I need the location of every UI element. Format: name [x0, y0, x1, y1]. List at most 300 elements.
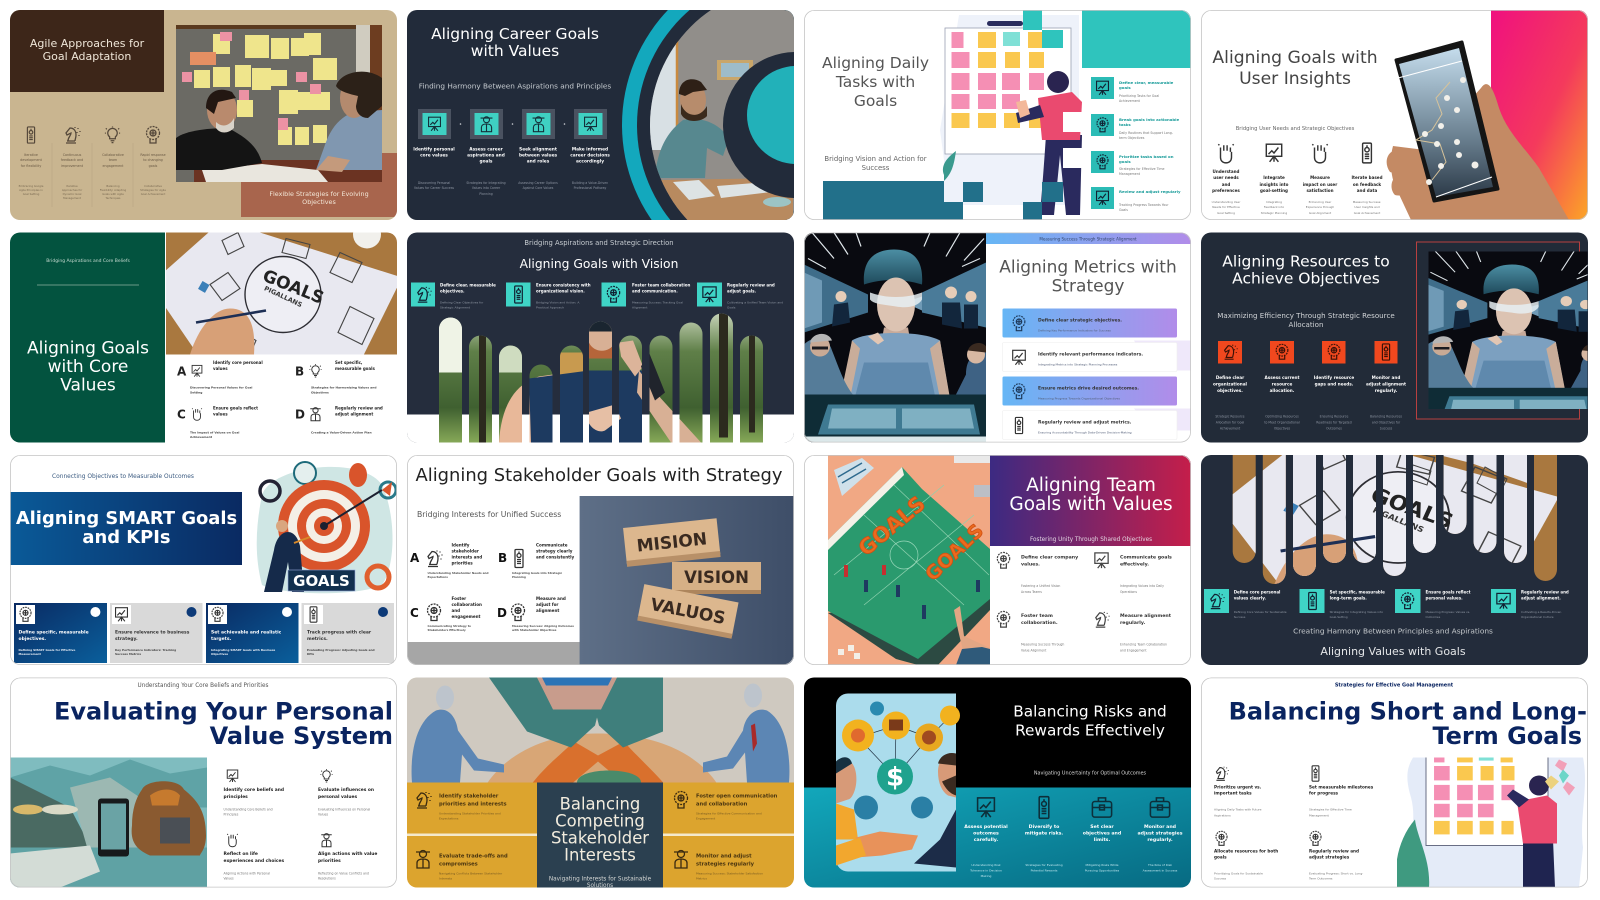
stakeholder grid A-D: Identify: [452, 542, 470, 548]
title block: Goal Adaptation: [43, 50, 131, 63]
gradient panel: [1491, 10, 1588, 220]
four alignment items: Organizational Culture: [1521, 615, 1554, 619]
stakeholder grid A-D: Stakeholders Effectively: [428, 628, 466, 632]
title: Goals: [854, 92, 897, 110]
four gold panels: Metrics: [696, 876, 707, 880]
title: Term Goals: [1432, 722, 1582, 750]
four KPI cards: targets.: [211, 636, 232, 642]
four objectives: Ensure consistency with: [536, 282, 591, 288]
title: Aligning Goals with: [1212, 48, 1378, 68]
item grid A-D: A: [177, 364, 187, 378]
four KPI cards: [14, 603, 394, 663]
photo: backpack and phone on table: [10, 758, 207, 888]
item grid A-D: Set specific,: [335, 360, 363, 365]
panel: Aligning Goals with User Insights: [1201, 10, 1588, 220]
step descriptions: Professional Pathway: [574, 186, 606, 190]
item grid A-D: The Impact of Values on Goal: [190, 430, 239, 434]
four value items: values.: [1021, 562, 1040, 568]
four value items: regularly.: [1120, 620, 1145, 626]
title banner: Aligning SMART Goals: [16, 508, 237, 529]
four approach columns with icons: Dynamic Goal: [63, 192, 82, 196]
step labels: [413, 146, 610, 164]
labels: objectives and: [1083, 830, 1121, 836]
panel: Balancing Short and Long-Term Goals: [1201, 678, 1588, 888]
four balance items: Aligning Daily Tasks with Future: [1214, 808, 1262, 812]
photo: wooden blocks Mision Vision Valuos: MISION: [636, 529, 708, 557]
four gold panels: Interests: [439, 876, 453, 880]
four approach columns with icons: Continuous: [63, 153, 82, 157]
step labels: between values: [519, 152, 557, 158]
four balance items: Success: [1214, 876, 1227, 880]
four balance items: for progress: [1309, 790, 1339, 796]
step labels: regularly.: [1375, 388, 1398, 393]
title: Evaluating Your Personal: [54, 698, 393, 726]
four objectives: Strategic Alignment: [440, 306, 471, 310]
step labels: and data: [1357, 188, 1377, 193]
metric rows: Integrating Metrics into Strategic Planning Processes: [1038, 362, 1118, 366]
four objectives: Bridging Vision and Action: A: [536, 300, 580, 304]
step descriptions: Outcomes: [1326, 426, 1342, 430]
step labels: Seek alignment: [519, 146, 557, 152]
photo: wooden blocks Mision Vision Valuos: [580, 496, 795, 665]
four value items: Fostering a Unified Vision: [1021, 584, 1060, 588]
four reflection items: Resolutions: [318, 876, 336, 880]
kicker: Bridging Aspirations and Strategic Direction: [524, 239, 674, 247]
step descriptions: [1212, 201, 1381, 214]
four reflection items: Identify core beliefs and: [224, 787, 284, 793]
step descriptions: Building a Value-Driven: [572, 181, 608, 185]
subtitle: Allocation: [1289, 320, 1323, 329]
four value items: Foster team: [1021, 613, 1053, 619]
descriptions: Making: [981, 874, 991, 878]
four balance items: Management: [1309, 814, 1330, 818]
step descriptions: Achievement: [1220, 426, 1241, 430]
subtitle block: [241, 153, 397, 217]
step descriptions: Ensuring Resource: [1320, 414, 1348, 418]
four value items: Integrating Values into Daily: [1120, 584, 1164, 588]
subtitle: Creating Harmony Between Principles and Aspirations: [1293, 626, 1493, 636]
kicker: Connecting Objectives to Measurable Outcomes: [52, 474, 194, 480]
step labels: and: [1222, 182, 1230, 187]
stakeholder grid A-D: adjust for: [536, 602, 558, 607]
panel: Aligning Team Goals with Values: [804, 455, 1191, 665]
photo: wooden blocks Mision Vision Valuos: VALUOS: [649, 595, 727, 629]
four balance items: [1214, 766, 1374, 880]
photo: two figures fitting puzzle blocks: [407, 678, 794, 784]
step labels: career decisions: [570, 152, 610, 158]
stakeholder grid A-D: Understanding Stakeholder Needs and: [428, 571, 489, 575]
subtitle: Bridging Vision and Action for: [824, 155, 927, 163]
four alignment items: Ensure goals reflect: [1426, 590, 1471, 594]
four reflection items: experiences and choices: [224, 858, 285, 864]
four alignment items: Defining Core Values for Sustainable: [1234, 610, 1287, 614]
stakeholder grid A-D: and consistently: [536, 554, 574, 560]
illustration: sticky-note board and man: [940, 15, 1082, 215]
center title block: [537, 782, 663, 889]
step descriptions: Experience through: [1306, 205, 1334, 209]
top kicker band: Measuring Success Through Strategic Alignment: [1039, 236, 1137, 242]
four approach columns with icons: development: [20, 158, 43, 162]
labels: Assess potential: [964, 824, 1008, 830]
panel: Aligning Goals with Vision: [407, 232, 794, 442]
four reflection items: Values: [224, 876, 234, 880]
subtitle: Bridging User Needs and Strategic Objectives: [1236, 126, 1355, 132]
step labels: impact on user: [1303, 182, 1337, 187]
action list: [1091, 77, 1181, 212]
four objectives: Foster team collaboration: [632, 282, 690, 288]
action list: Review and adjust regularly: [1119, 189, 1181, 194]
step labels: objectives.: [1217, 388, 1243, 393]
title: Strategy: [1052, 276, 1124, 296]
item grid A-D: values: [213, 412, 228, 416]
four gold panels: [407, 782, 794, 888]
four KPI cards: KPIs: [307, 652, 314, 656]
four approach columns with icons: Goals with Agile: [102, 192, 124, 196]
step descriptions: User Insights and: [1354, 205, 1380, 209]
four reflection items: Evaluate influences on: [318, 787, 374, 793]
subtitle: Success: [862, 164, 890, 172]
descriptions: Pursuing Opportunities: [1085, 868, 1120, 872]
four alignment items: [1204, 589, 1569, 619]
descriptions: Strategies for Evaluating: [1025, 863, 1063, 867]
panel: Balancing Risks and Rewards Effectively: [804, 678, 1191, 888]
photo: woman with visor at futuristic table: [804, 232, 986, 442]
step descriptions: Discovering Personal: [418, 181, 450, 185]
item grid A-D: adjust alignment: [335, 412, 373, 416]
stakeholder grid A-D: Communicating Strategy to: [428, 624, 471, 628]
item grid A-D: Achievement: [190, 435, 213, 439]
four alignment items: Set specific, measurable: [1330, 590, 1385, 594]
title block: Agile Approaches for: [30, 37, 145, 50]
step descriptions: Assessing Career Options: [518, 181, 558, 185]
step descriptions: and Objectives for: [1372, 420, 1401, 424]
labels: Diversify to: [1029, 824, 1060, 830]
four approach columns with icons: feedback and: [61, 158, 83, 162]
title banner: [10, 492, 242, 565]
four reflection items: [224, 769, 377, 880]
four balance items: Evaluating Progress: Short vs. Long-: [1309, 872, 1363, 876]
step descriptions: Strategies for Integrating: [466, 181, 506, 185]
four gold panels: Expectations: [439, 816, 459, 820]
step descriptions: Success: [1380, 426, 1393, 430]
four KPI cards: Key Performance Indicators: Tracking: [115, 648, 176, 652]
four icons: [1218, 143, 1371, 163]
step labels: Assess current: [1265, 375, 1299, 380]
kicker: Understanding Your Core Beliefs and Priorities: [138, 683, 268, 689]
four reflection items: Evaluating Influences on Personal: [318, 808, 370, 812]
four gold panels: Understanding Stakeholder Priorities and: [439, 812, 501, 816]
pale background shapes: [1134, 340, 1191, 430]
panel: Aligning SMART Goals and KPIs: [10, 455, 397, 665]
step descriptions: Against Core Values: [523, 186, 554, 190]
title: Aligning Resources to: [1222, 252, 1390, 270]
four KPI cards: Objectives: [211, 652, 228, 656]
four objectives: objectives.: [440, 288, 465, 294]
four reflection items: personal values: [318, 794, 357, 800]
step labels: Identify personal: [413, 146, 455, 152]
action list: Management: [1119, 172, 1141, 176]
four approach columns with icons: improvement: [61, 164, 84, 168]
panel: Aligning Resources to Achieve Objectives: [1201, 232, 1600, 442]
four value items: effectively.: [1120, 562, 1149, 568]
step descriptions: Goal Alignment: [1309, 211, 1332, 215]
descriptions: The Role of Risk: [1147, 863, 1172, 867]
title: [431, 28, 598, 56]
four reflection items: principles: [224, 794, 248, 800]
four value items: Operations: [1120, 590, 1137, 594]
item grid A-D: D: [295, 408, 305, 422]
step labels: [1212, 169, 1383, 193]
photo in hanging slits: goals diagram: [1164, 419, 1570, 611]
step labels: gaps and needs.: [1315, 382, 1354, 386]
four gold panels: strategies regularly: [696, 862, 755, 868]
step descriptions: Measuring Success:: [1353, 200, 1381, 204]
action list: Achievement: [1119, 99, 1141, 103]
labels: Monitor and: [1144, 824, 1176, 830]
step descriptions: Understanding User: [1212, 200, 1241, 204]
item grid A-D: Strategies for Harmonizing Values and: [311, 386, 376, 390]
four alignment items: Strategies for Integrating Values into: [1330, 610, 1383, 614]
four approach columns with icons: Goal Setting: [23, 192, 40, 196]
four reflection items: Values: [318, 812, 328, 816]
photo: wooden blocks Mision Vision Valuos: VISION: [684, 568, 749, 587]
stakeholder grid A-D: C: [410, 606, 419, 620]
four approach columns with icons: Approaches for: [62, 188, 83, 192]
stakeholder grid A-D: priorities: [452, 560, 473, 566]
gradient title block: Goals with Values: [1009, 494, 1173, 515]
title: Aligning Career Goals: [431, 25, 599, 43]
four approach columns with icons: Agile Principles in: [19, 188, 43, 192]
stakeholder grid A-D: strategy clearly: [536, 548, 573, 554]
step descriptions: Integrating: [1266, 200, 1282, 204]
green side block with title: Aligning Goals: [27, 338, 149, 358]
subtitle: Finding Harmony Between Aspirations and Principles: [419, 82, 611, 90]
title: [999, 258, 1177, 296]
four balance items: goals: [1214, 854, 1227, 860]
four value items: Measuring Success Through: [1021, 642, 1064, 646]
stakeholder grid A-D: B: [498, 551, 507, 565]
illustration: target with arrow and GOALS sign: GOALS: [293, 572, 350, 590]
four approach columns with icons: to changing: [143, 158, 163, 162]
step labels: Integrate: [1263, 175, 1285, 180]
photo: goals diagram and hand: [166, 232, 397, 354]
four alignment items: Cultivating a Results-Driven: [1521, 610, 1561, 614]
four balance items: Regularly review and: [1309, 848, 1359, 854]
labels: adjust strategies: [1138, 830, 1183, 836]
photo: football pitch with GOALS lettering: [828, 455, 990, 665]
four gold panels: Strategies for Effective Communication and: [696, 812, 762, 816]
four approach columns with icons: Techniques: [105, 196, 121, 200]
photo: hand holding phone: [1387, 42, 1569, 220]
step labels: and roles: [527, 158, 550, 164]
four balance items: adjust strategies: [1309, 854, 1350, 860]
title: [822, 56, 928, 106]
four approach columns with icons: [19, 126, 166, 207]
step labels: user needs: [1213, 175, 1239, 180]
action list: term Objectives: [1119, 136, 1145, 140]
action list: goals: [1119, 159, 1131, 164]
title: Aligning Values with Goals: [1320, 645, 1466, 658]
stakeholder grid A-D: A: [410, 551, 420, 565]
four step icons: [418, 109, 607, 139]
step descriptions: Objectives: [1274, 426, 1291, 430]
title: [1013, 702, 1167, 740]
four balance items: important tasks: [1214, 790, 1252, 796]
four objectives: Measuring Success: Tracking Goal: [632, 300, 683, 304]
subtitle: Maximizing Efficiency Through Strategic Resource: [1217, 311, 1395, 320]
step descriptions: Goal Achievement: [1354, 211, 1381, 215]
four gold panels: compromises: [439, 862, 478, 868]
item grid A-D: Objectives: [311, 390, 329, 394]
descriptions: Mitigating Risks While: [1085, 863, 1119, 867]
four approach columns with icons: for flexibility: [21, 164, 41, 168]
center title block: Solutions: [587, 883, 613, 889]
stakeholder grid A-D: with Stakeholder Objectives: [512, 628, 557, 632]
four reflection items: Aligning Actions with Personal: [224, 872, 270, 876]
gradient title block: Aligning Team: [1026, 475, 1156, 496]
four gold panels: Foster open communication: [696, 794, 778, 800]
four balance items: Aspirations: [1214, 814, 1231, 818]
subtitle block: Objectives: [302, 198, 336, 206]
stakeholder grid A-D: Foster: [452, 596, 466, 601]
step descriptions: [1215, 414, 1402, 430]
step labels: [1213, 375, 1406, 393]
four KPI cards: metrics.: [307, 636, 328, 642]
stakeholder grid A-D: stakeholder: [452, 548, 479, 554]
metric rows: Measuring Progress Towards Organizational Objectives: [1038, 396, 1120, 400]
title: Aligning Metrics with: [999, 258, 1177, 278]
four balance items: Prioritize urgent vs.: [1214, 784, 1262, 790]
item grid A-D: Creating a Value-Driven Action Plan: [311, 430, 372, 434]
action list: Prioritizing Tasks for Goal: [1119, 94, 1159, 98]
item grid A-D: Setting: [190, 390, 202, 394]
title: [54, 698, 393, 750]
four approach columns with icons: Embracing Google: [19, 184, 44, 188]
item grid A-D: values: [213, 366, 228, 371]
step descriptions: Enhancing User: [1309, 200, 1332, 204]
top kicker band: [986, 232, 1191, 244]
title: Balancing Short and Long-: [1229, 698, 1587, 726]
step descriptions: Strategic Resource: [1215, 414, 1245, 418]
four gold panels: Monitor and adjust: [696, 854, 752, 860]
four objectives: Goals: [727, 306, 736, 310]
illustration: people shaking hands around dollar network: [836, 694, 960, 872]
decorative teal blocks: [823, 10, 1191, 220]
four objectives: Define clear, measurable: [440, 282, 496, 288]
four approach columns with icons: Collaborative: [102, 153, 124, 157]
step labels: Understand: [1213, 169, 1240, 174]
metric rows: Regularly review and adjust metrics.: [1038, 420, 1132, 426]
stakeholder grid A-D: Planning: [512, 575, 526, 579]
action list: Tracking Progress Towards Your: [1118, 203, 1169, 207]
step labels: Make informed: [572, 146, 608, 152]
center title block: Balancing: [560, 794, 640, 814]
four alignment items: long-term goals.: [1330, 596, 1367, 600]
step labels: resource: [1272, 382, 1292, 386]
stakeholder grid A-D: interests and: [452, 554, 482, 560]
grey footer band: [407, 642, 580, 665]
labels: mitigate risks.: [1025, 830, 1063, 836]
step labels: aspirations and: [467, 152, 505, 158]
panel: Aligning Metrics with Strategy: [804, 232, 1191, 442]
title: Value System: [210, 722, 393, 750]
four approach columns with icons: Iterative: [24, 153, 38, 157]
center title block: Competing: [555, 812, 645, 830]
four approach columns with icons: Goal Achievement: [141, 192, 165, 196]
four approach columns with icons: Collaborative: [144, 184, 162, 188]
four reflection items: Understanding Core Beliefs and: [224, 808, 273, 812]
center title block: Interests: [564, 846, 636, 864]
metric rows: Ensuring Accountability Through Data-Driven Decision-Making: [1038, 430, 1132, 434]
four alignment items: values clearly.: [1234, 596, 1266, 600]
step labels: goals: [480, 158, 493, 164]
stakeholder grid A-D: [410, 542, 574, 632]
four alignment items: Regularly review and: [1521, 590, 1569, 594]
step descriptions: Planning: [479, 192, 493, 196]
stakeholder grid A-D: Expectations: [428, 575, 448, 579]
title: [1212, 48, 1378, 89]
step descriptions: Values for Career Success: [414, 186, 454, 190]
four objectives: Practical Approach: [536, 306, 564, 310]
stakeholder grid A-D: engagement: [452, 614, 481, 619]
labels: Set clear: [1090, 824, 1114, 830]
action list: goals: [1119, 85, 1131, 90]
green side block with title: Values: [60, 376, 116, 396]
stakeholder grid A-D: and: [452, 608, 460, 613]
four gold panels: Measuring Success: Stakeholder Satisfaction: [696, 872, 763, 876]
item grid A-D: Discovering Personal Values for Goal: [190, 386, 252, 390]
stakeholder grid A-D: Measure and: [536, 596, 566, 601]
four value items: collaboration.: [1021, 620, 1058, 626]
four gold panels: Evaluate trade-offs and: [439, 854, 508, 860]
four approach columns with icons: engagement: [103, 164, 124, 168]
step descriptions: Needs for Effective: [1212, 205, 1240, 209]
four gold panels: Identify stakeholder: [439, 794, 499, 800]
item grid A-D: Ensure goals reflect: [213, 406, 258, 410]
step labels: Assess career: [469, 146, 504, 152]
action list: Prioritize tasks based on: [1119, 154, 1174, 159]
step labels: satisfaction: [1306, 188, 1334, 193]
step labels: Identify resource: [1314, 375, 1354, 380]
labels: carefully.: [974, 837, 998, 843]
title: Tasks with: [835, 73, 915, 91]
title: Rewards Effectively: [1015, 722, 1165, 740]
step labels: Iterate based: [1351, 175, 1383, 180]
four objectives: Alignment: [632, 306, 648, 310]
step labels: Monitor and: [1372, 375, 1400, 380]
green side block with title: [10, 232, 165, 442]
step labels: Measure: [1310, 175, 1330, 180]
four balance items: Allocate resources for both: [1214, 848, 1278, 854]
four approach columns with icons: Balancing: [106, 184, 120, 188]
labels: [964, 824, 1183, 843]
four gold panels: and collaboration: [696, 802, 748, 808]
step labels: adjust alignment: [1366, 382, 1406, 386]
four value items: and Engagement: [1120, 648, 1147, 652]
four approach columns with icons: goals: [149, 164, 158, 168]
step descriptions: Goal Setting: [1217, 211, 1235, 215]
four alignment items: Define core personal: [1234, 590, 1281, 594]
four KPI cards: Success Metrics: [115, 652, 141, 656]
step descriptions: Values into Career: [472, 186, 501, 190]
step descriptions: to Meet Organizational: [1264, 420, 1300, 424]
four KPI cards: Define specific, measurable: [18, 630, 89, 636]
panel: Aligning Daily Tasks with Goals: [804, 10, 1191, 220]
four reflection items: Align actions with value: [318, 851, 377, 857]
four objectives: and communication.: [632, 288, 678, 294]
title block: [10, 10, 164, 92]
four gold panels: Navigating Conflicts Between Stakeholder: [439, 872, 503, 876]
